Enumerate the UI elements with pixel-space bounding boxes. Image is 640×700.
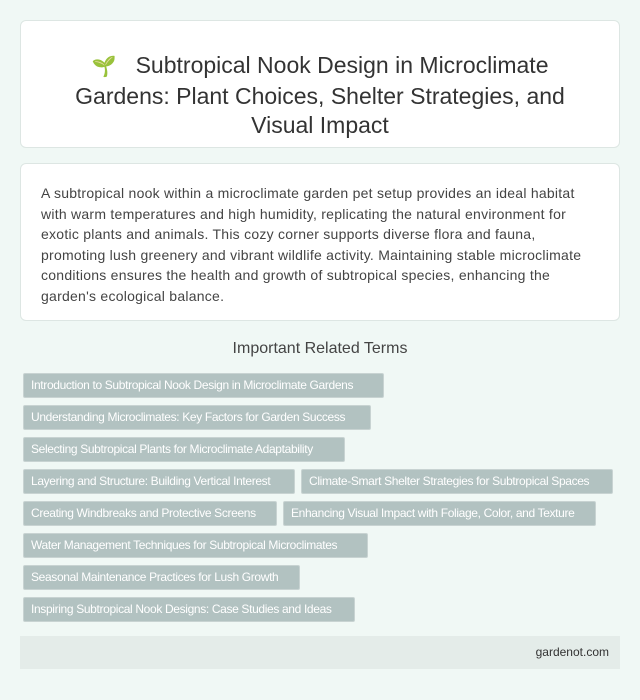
section heading: Important Related Terms — [233, 340, 407, 357]
header card — [20, 20, 620, 148]
tag 3: Selecting Subtropical Plants for Microclimate Adaptability — [31, 442, 313, 456]
tag 4: Layering and Structure: Building Vertical Interest — [31, 474, 270, 488]
tag 8: Water Management Techniques for Subtropical Microclimates — [31, 538, 337, 552]
tag 7: Enhancing Visual Impact with Foliage, Color, and Texture — [291, 506, 574, 520]
tag 5: Climate-Smart Shelter Strategies for Subtropical Spaces — [309, 474, 589, 488]
footer — [20, 636, 620, 669]
tag 6: Creating Windbreaks and Protective Screens — [31, 506, 256, 520]
description card — [20, 163, 620, 321]
title: 🌱 Subtropical Nook Design in Microclimate Gardens: Plant Choices, Shelter Strategies, and Visual Impact — [75, 52, 565, 138]
tag 8 — [23, 533, 368, 558]
tag 9: Seasonal Maintenance Practices for Lush Growth — [31, 570, 278, 584]
tag 9 — [23, 565, 300, 590]
description text: A subtropical nook within a microclimate garden pet setup provides an ideal habitat with warm temperatures and high humidity, replicating the natural environment for exotic plants and animals. This cozy corner supports diverse flora and fauna, promoting lush greenery and vibrant wildlife activity. Maintaining stable microclimate conditions ensures the health and growth of subtropical species, enhancing the garden's ecological balance. — [41, 185, 581, 304]
tag 4 — [23, 469, 295, 494]
tag 1 — [23, 373, 384, 398]
tag 6 — [23, 501, 277, 526]
tag 10: Inspiring Subtropical Nook Designs: Case Studies and Ideas — [31, 602, 332, 616]
tag 2: Understanding Microclimates: Key Factors for Garden Success — [31, 410, 345, 424]
tag 7 — [283, 501, 596, 526]
tag 10 — [23, 597, 355, 622]
tag 2 — [23, 405, 371, 430]
tag 3 — [23, 437, 345, 462]
tag 1: Introduction to Subtropical Nook Design in Microclimate Gardens — [31, 378, 353, 392]
tag 5 — [301, 469, 613, 494]
footer: gardenot.com — [536, 645, 609, 659]
